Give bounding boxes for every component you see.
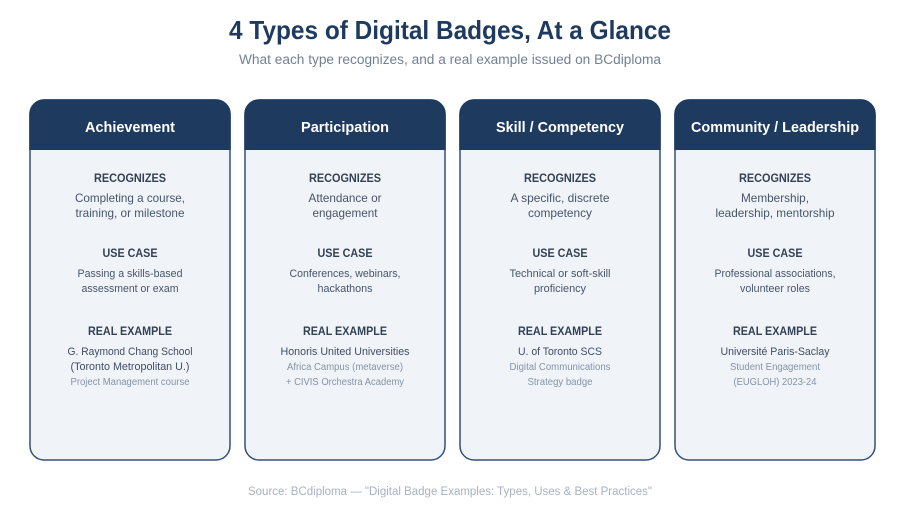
section: real example: REAL EXAMPLE bbox=[518, 324, 602, 338]
section: use case bbox=[714, 246, 836, 295]
section: real example: Project Management course bbox=[70, 377, 190, 388]
section: recognizes bbox=[510, 171, 610, 220]
section: real example: REAL EXAMPLE bbox=[88, 324, 172, 338]
section: recognizes: engagement bbox=[312, 206, 378, 220]
section: real example: Honoris United Universities bbox=[280, 346, 410, 358]
section: use case: volunteer roles bbox=[740, 283, 810, 295]
section: use case: Technical or soft-skill bbox=[510, 268, 610, 280]
section: real example: REAL EXAMPLE bbox=[303, 324, 387, 338]
section: real example: REAL EXAMPLE bbox=[733, 324, 817, 338]
section: use case bbox=[510, 246, 610, 295]
section: use case: USE CASE bbox=[532, 246, 588, 260]
header: Participation: Participation bbox=[301, 119, 389, 136]
section: recognizes bbox=[716, 171, 835, 220]
section: use case: assessment or exam bbox=[82, 283, 178, 295]
header: Skill / Competency: Skill / Competency bbox=[496, 119, 625, 136]
panel: Participation bbox=[244, 99, 446, 460]
section: use case bbox=[290, 246, 400, 295]
section: use case: USE CASE bbox=[102, 246, 158, 260]
section: recognizes: Membership, bbox=[741, 191, 809, 205]
section: real example: Digital Communications bbox=[510, 362, 610, 373]
section: recognizes: training, or milestone bbox=[76, 206, 185, 220]
section: real example bbox=[68, 324, 192, 388]
section: recognizes: leadership, mentorship bbox=[716, 206, 835, 220]
section: use case: hackathons bbox=[318, 283, 373, 295]
source note: Source: BCdiploma — "Digital Badge Examples: Types, Uses & Best Practices" bbox=[248, 486, 652, 498]
header: Participation bbox=[244, 99, 446, 150]
header: Community / Leadership: Community / Leadership bbox=[691, 119, 859, 136]
title: 4 Types of Digital Badges, At a Glance bbox=[229, 15, 671, 45]
section: recognizes bbox=[75, 171, 185, 220]
section: recognizes: competency bbox=[528, 206, 592, 220]
section: use case: Conferences, webinars, bbox=[290, 268, 400, 280]
subtitle: What each type recognizes, and a real example issued on BCdiploma bbox=[239, 52, 661, 67]
section: real example: Strategy badge bbox=[528, 377, 593, 388]
section: recognizes: RECOGNIZES bbox=[94, 171, 166, 185]
section: real example bbox=[720, 324, 830, 388]
section: use case: proficiency bbox=[534, 283, 586, 295]
section: real example: U. of Toronto SCS bbox=[518, 346, 602, 358]
section: use case bbox=[78, 246, 182, 295]
section: real example: (EUGLOH) 2023-24 bbox=[734, 377, 817, 388]
header: Community / Leadership bbox=[674, 99, 876, 150]
panel: Achievement bbox=[29, 99, 231, 460]
section: real example: G. Raymond Chang School bbox=[68, 346, 192, 358]
section: real example: Africa Campus (metaverse) bbox=[287, 362, 403, 373]
section: use case: USE CASE bbox=[318, 246, 372, 260]
section: real example: (Toronto Metropolitan U.) bbox=[70, 361, 190, 373]
section: real example bbox=[280, 324, 410, 388]
section: recognizes: RECOGNIZES bbox=[524, 171, 596, 185]
panel: Skill / Competency bbox=[459, 99, 661, 460]
header: Skill / Competency bbox=[459, 99, 661, 150]
section: real example bbox=[510, 324, 610, 388]
section: recognizes bbox=[308, 171, 382, 220]
section: recognizes: RECOGNIZES bbox=[739, 171, 811, 185]
section: use case: USE CASE bbox=[748, 246, 802, 260]
section: real example: Université Paris-Saclay bbox=[720, 346, 830, 358]
panel: Community / Leadership bbox=[674, 99, 876, 460]
section: use case: Professional associations, bbox=[714, 268, 836, 280]
section: recognizes: Attendance or bbox=[308, 191, 382, 205]
section: recognizes: Completing a course, bbox=[75, 191, 185, 205]
header: Achievement: Achievement bbox=[85, 119, 175, 136]
header: Achievement bbox=[29, 99, 231, 150]
section: use case: Passing a skills-based bbox=[78, 268, 182, 280]
section: real example: + CIVIS Orchestra Academy bbox=[286, 377, 404, 388]
section: recognizes: RECOGNIZES bbox=[309, 171, 381, 185]
section: real example: Student Engagement bbox=[730, 362, 820, 373]
section: recognizes: A specific, discrete bbox=[510, 191, 610, 205]
